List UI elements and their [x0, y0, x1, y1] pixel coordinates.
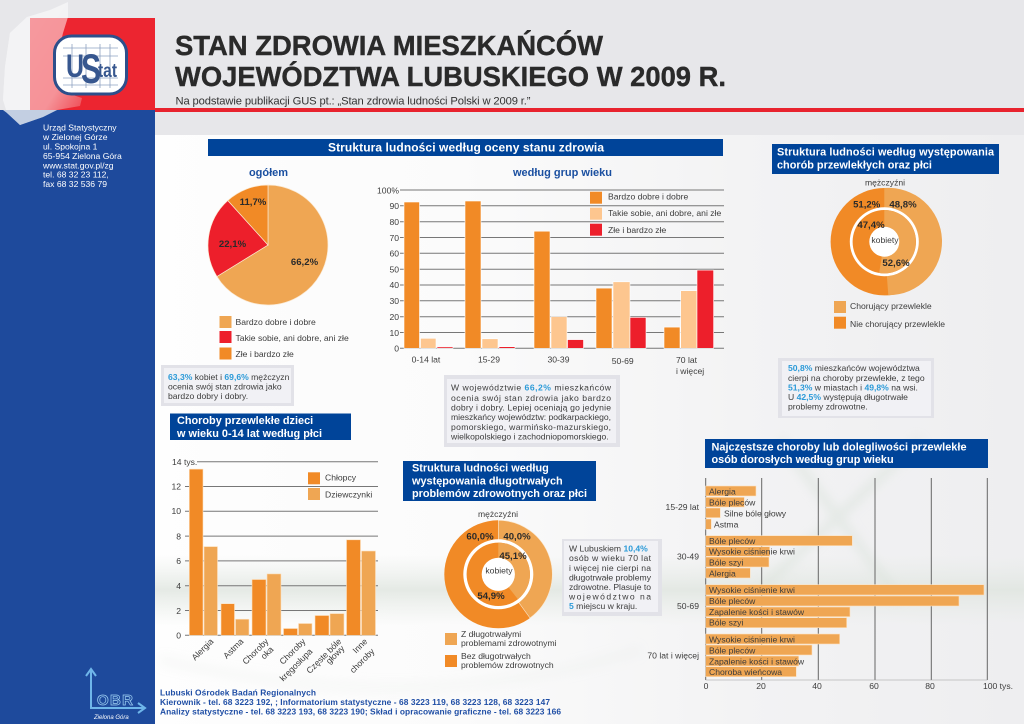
footer contact: Analizy statystyczne - tel. 68 3223 193, 68 3223 190; Skład i opracowanie graficzne - tel. 68 3223 166 [160, 706, 561, 716]
horizontal chart category labels: 50-69 [677, 601, 699, 611]
bar chart y axis labels: 70 [389, 233, 399, 243]
horizontal bar labels: Choroba wieńcowa [709, 667, 782, 677]
callout: elderly without problems: zdrowotne. Plasuje to [569, 582, 651, 592]
callout: voivodeship ranking: W województwie 66,2% mieszkańców [451, 382, 612, 392]
sidebar address: fax 68 32 536 79 [43, 179, 107, 189]
heading: self-rated health structure [208, 139, 723, 156]
callout: chronic disease share: 51,3% w miastach i 49,8% na wsi. [788, 382, 918, 392]
background soft band [155, 555, 1024, 625]
bar chart x axis labels: 0-14 lat [412, 354, 441, 364]
callout: voivodeship ranking [444, 375, 620, 447]
header background [155, 0, 1024, 135]
children chart x axis labels: Alergia [189, 636, 216, 662]
pie labels: 11,7% [240, 197, 267, 208]
horizontal bar labels: Alergia [709, 486, 736, 496]
donut labels: chronic diseases: mężczyźni [865, 178, 905, 188]
callout: voivodeship ranking: dobry i dobry. Lepiej oceniają go jedynie [451, 402, 611, 412]
callout: elderly without problems: województwo na [568, 592, 651, 602]
donut labels: chronic diseases: 47,4% [857, 220, 885, 231]
logo: UStat: tat [98, 61, 118, 82]
sidebar address: w Zielonej Górze [42, 132, 108, 142]
callout: chronic disease share [778, 358, 934, 418]
donut legend: long-term problems: Bez długotrwałych [461, 651, 531, 661]
horizontal bar labels [709, 486, 805, 677]
bar chart legend [590, 192, 721, 236]
children chart y axis labels: 14 tys. [172, 457, 197, 467]
left blue sidebar [0, 110, 155, 724]
bar chart x axis labels: 70 lat [676, 355, 698, 365]
bar chart y axis labels: 0 [394, 344, 399, 354]
donut labels: long-term problems: 54,9% [477, 591, 505, 602]
donut labels: long-term problems [466, 509, 531, 602]
logo: LOBR: OBR [97, 692, 133, 709]
children chart y axis labels: 0 [176, 630, 181, 640]
pie labels: 66,2% [291, 257, 319, 268]
heading: long-term health problems: występowania długotrwałych [411, 476, 563, 488]
donut legend: chronic diseases [834, 301, 945, 329]
sidebar address: ul. Spokojna 1 [43, 142, 98, 152]
donut legend: chronic diseases: Nie chorujący przewlekle [850, 319, 945, 329]
horizontal chart category labels: 70 lat i więcej [647, 650, 699, 660]
children chart y axis labels: 12 [171, 482, 181, 492]
bar chart y axis labels: 30 [389, 296, 399, 306]
horizontal bar labels: Wysokie ciśnienie krwi [709, 585, 795, 595]
bar chart y axis labels: 20 [389, 312, 399, 322]
callout: elderly without problems: W Lubuskiem 10,4% [569, 543, 648, 553]
bar chart y axis labels: 50 [389, 264, 399, 274]
bar chart legend: Bardzo dobre i dobre [608, 192, 688, 202]
horizontal bar labels: Zapalenie kości i stawów [709, 656, 805, 666]
horizontal chart value axis: 60 [869, 681, 879, 691]
horizontal chart category labels: 15-29 lat [666, 502, 700, 512]
donut labels: long-term problems: 60,0% [466, 532, 494, 542]
map of Lubuskie region [3, 2, 82, 125]
callout: elderly without problems: 5 miejscu w kraju. [569, 601, 637, 611]
horizontal bar labels: Astma [714, 520, 739, 530]
donut labels: long-term problems: 45,1% [499, 551, 527, 562]
pie chart: overall health [208, 185, 328, 305]
bar chart: health by age group [400, 190, 724, 348]
footer contact: Lubuski Ośrodek Badań Regionalnych [160, 688, 316, 698]
pie legend [220, 316, 349, 360]
horizontal chart value axis [704, 681, 1013, 691]
horizontal chart value axis: 80 [925, 681, 935, 691]
bar chart x axis labels: 50-69 [612, 356, 634, 366]
children chart y axis labels: 8 [176, 532, 181, 542]
horizontal chart value axis: 100 tys. [983, 681, 1013, 691]
children chart x axis labels: oka [259, 644, 276, 661]
callout: women and men: ocenia swój stan zdrowia jako [168, 382, 282, 392]
children chart legend [308, 472, 372, 500]
heading: most common diseases: osób dorosłych według grup wieku [712, 454, 894, 466]
pie labels [219, 197, 319, 268]
children chart x axis labels: Częste bóle [304, 636, 344, 676]
bar chart y axis labels: 60 [389, 248, 399, 258]
heading: chronic diseases by sex: Struktura ludności według występowania [777, 147, 995, 159]
children chart x axis labels: Inne [351, 636, 370, 655]
callout: chronic disease share: problemy zdrowotne. [788, 402, 868, 412]
horizontal chart category labels: 30-49 [677, 552, 699, 562]
donut labels: chronic diseases: 52,6% [882, 258, 910, 269]
horizontal chart value axis: 40 [812, 681, 822, 691]
callout: elderly without problems: osób w wieku 70 lat [569, 553, 652, 563]
donut chart: chronic diseases [831, 188, 942, 295]
bar chart x axis labels: 15-29 [478, 354, 500, 364]
callout: elderly without problems: i więcej nie cierpi na [569, 563, 651, 573]
sidebar address: 65-954 Zielona Góra [43, 151, 122, 161]
heading: long-term health problems [403, 461, 596, 501]
logo: UStat: S [81, 45, 101, 92]
horizontal chart category labels [647, 502, 700, 660]
callout: chronic disease share: cierpi na choroby przewlekłe, z tego [788, 373, 925, 383]
horizontal bar labels: Bóle pleców [709, 498, 756, 508]
subheading: według grup wieku: według grup wieku [512, 167, 612, 179]
children chart y axis labels: 6 [176, 556, 181, 566]
callout: chronic disease share: U 42,5% występują długotrwałe [788, 392, 908, 402]
callout: voivodeship ranking: ocenia swój stan zdrowia jako bardzo [451, 393, 611, 403]
donut legend: long-term problems [445, 629, 557, 670]
children chart x axis labels: choroby [348, 646, 377, 675]
callout: voivodeship ranking: pomorskiego, warmińsko-mazurskiego, [451, 422, 611, 432]
callout: elderly without problems: długotrwałe problemy [569, 572, 652, 582]
bar chart legend: Złe i bardzo złe [608, 225, 666, 235]
children chart legend: Dziewczynki [325, 490, 372, 500]
heading: long-term health problems: problemów zdrowotnych oraz płci [412, 488, 587, 500]
children chart x axis labels: głowy [324, 643, 347, 666]
donut legend: long-term problems: problemów zdrowotnych [461, 660, 554, 670]
donut chart: long-term problems [444, 520, 552, 628]
donut legend: long-term problems: problemami zdrowotnymi [461, 638, 557, 648]
children chart x axis labels: Choroby [277, 636, 308, 666]
horizontal chart value axis: 20 [756, 681, 766, 691]
bar chart x axis labels [412, 354, 704, 376]
children chart y axis labels: 2 [176, 606, 181, 616]
bar chart x axis labels: i więcej [676, 366, 704, 376]
pie legend: Takie sobie, ani dobre, ani złe [236, 333, 349, 343]
pie labels: 22,1% [219, 239, 247, 250]
bar chart y axis labels: 40 [389, 280, 399, 290]
horizontal bar labels: Wysokie ciśnienie krwi [709, 546, 795, 556]
sidebar address: tel. 68 32 23 112, [43, 170, 109, 180]
heading: long-term health problems: Struktura ludności według [412, 462, 549, 474]
bar chart y axis labels: 90 [389, 201, 399, 211]
title: STAN ZDROWIA MIESZKAŃCÓW [175, 30, 604, 61]
red logo square [30, 18, 155, 110]
bar chart y axis labels: 10 [389, 328, 399, 338]
callout: women and men [161, 365, 294, 406]
children chart x axis labels [189, 636, 377, 683]
heading: children chronic diseases [170, 414, 351, 440]
horizontal bar labels: Alergia [709, 568, 736, 578]
horizontal bar labels: Bóle szyi [709, 618, 743, 628]
bar chart y axis labels [377, 186, 399, 354]
callout: women and men: bardzo dobry i dobry. [168, 391, 248, 401]
donut legend: chronic diseases: Chorujący przewlekle [850, 301, 932, 311]
children chart y axis labels: 4 [176, 581, 181, 591]
donut labels: chronic diseases [853, 178, 917, 269]
callout: women and men: 63,3% kobiet i 69,6% mężczyzn [168, 372, 290, 382]
callout: voivodeship ranking: wielkopolskiego i zachodniopomorskiego. [450, 432, 609, 442]
bar chart: children by sex [185, 462, 378, 635]
subtitle: Na podstawie publikacji GUS pt.: „Stan zdrowia ludności Polski w 2009 r.” [176, 96, 531, 108]
children chart x axis labels: Choroby [240, 636, 271, 666]
children chart x axis labels: kręgosłupa [278, 646, 315, 683]
children chart legend: Chłopcy [325, 472, 357, 482]
callout: voivodeship ranking: mieszkańcy województw: podkarpackiego, [451, 412, 611, 422]
heading: self-rated health structure: Struktura ludności według oceny stanu zdrowia [328, 140, 604, 154]
logo: LOBR: Zielona Góra [93, 715, 129, 721]
callout: chronic disease share: 50,8% mieszkańców województwa [788, 363, 920, 373]
background diagonal shapes [160, 440, 920, 688]
bar chart y axis labels: 80 [389, 217, 399, 227]
subheading: ogółem: ogółem [249, 167, 288, 179]
horizontal chart value axis: 0 [704, 681, 709, 691]
heading: chronic diseases by sex [772, 144, 999, 174]
children chart x axis labels: Astma [221, 636, 246, 661]
logo: UStat: U [66, 48, 84, 84]
horizontal bar labels: Bóle pleców [709, 536, 756, 546]
bar chart y axis labels: 100% [377, 186, 399, 196]
horizontal bar labels: Bóle pleców [709, 646, 756, 656]
bar chart legend: Takie sobie, ani dobre, ani złe [608, 208, 721, 218]
red accent line [155, 108, 1024, 112]
donut labels: chronic diseases: 51,2% [853, 200, 881, 210]
horizontal bar labels: Bóle pleców [709, 596, 756, 606]
heading: most common diseases: Najczęstsze choroby lub dolegliwości przewlekłe [712, 441, 966, 453]
title: WOJEWÓDZTWA LUBUSKIEGO W 2009 R. [175, 61, 726, 92]
donut labels: chronic diseases: kobiety [871, 235, 899, 245]
sidebar address [42, 122, 122, 189]
pie legend: Bardzo dobre i dobre [236, 317, 316, 327]
logo: UStat [54, 36, 126, 94]
title [175, 30, 726, 92]
heading: children chronic diseases: w wieku 0-14 lat według płci [176, 428, 322, 440]
donut labels: chronic diseases: 48,8% [889, 200, 917, 210]
horizontal bar labels: Zapalenie kości i stawów [709, 607, 805, 617]
horizontal bar labels: Wysokie ciśnienie krwi [709, 634, 795, 644]
sidebar address: Urząd Statystyczny [43, 122, 117, 132]
donut labels: long-term problems: 40,0% [503, 532, 531, 542]
horizontal bar chart: adults [706, 478, 987, 680]
logo: LOBR [86, 669, 145, 721]
donut legend: long-term problems: Z długotrwałymi [461, 629, 521, 639]
heading: chronic diseases by sex: chorób przewlekłych oraz płci [777, 160, 932, 172]
children chart y axis labels: 10 [171, 506, 181, 516]
horizontal bar labels: Bóle szyi [709, 558, 743, 568]
horizontal bar labels: Silne bóle głowy [724, 508, 787, 518]
donut labels: long-term problems: kobiety [485, 566, 513, 576]
sidebar address: www.stat.gov.pl/zg [42, 160, 114, 170]
donut labels: long-term problems: mężczyźni [478, 509, 518, 519]
pie legend: Złe i bardzo złe [236, 349, 294, 359]
children chart y axis labels [171, 457, 197, 640]
heading: most common diseases [705, 439, 988, 468]
callout: elderly without problems [562, 539, 662, 616]
bar chart x axis labels: 30-39 [548, 354, 570, 364]
heading: children chronic diseases: Choroby przewlekłe dzieci [177, 415, 313, 427]
footer contact [160, 688, 561, 716]
footer contact: Kierownik - tel. 68 3223 192, ; Informatorium statystyczne - 68 3223 119, 68 3223 128, 68 3223 147 [160, 697, 550, 707]
